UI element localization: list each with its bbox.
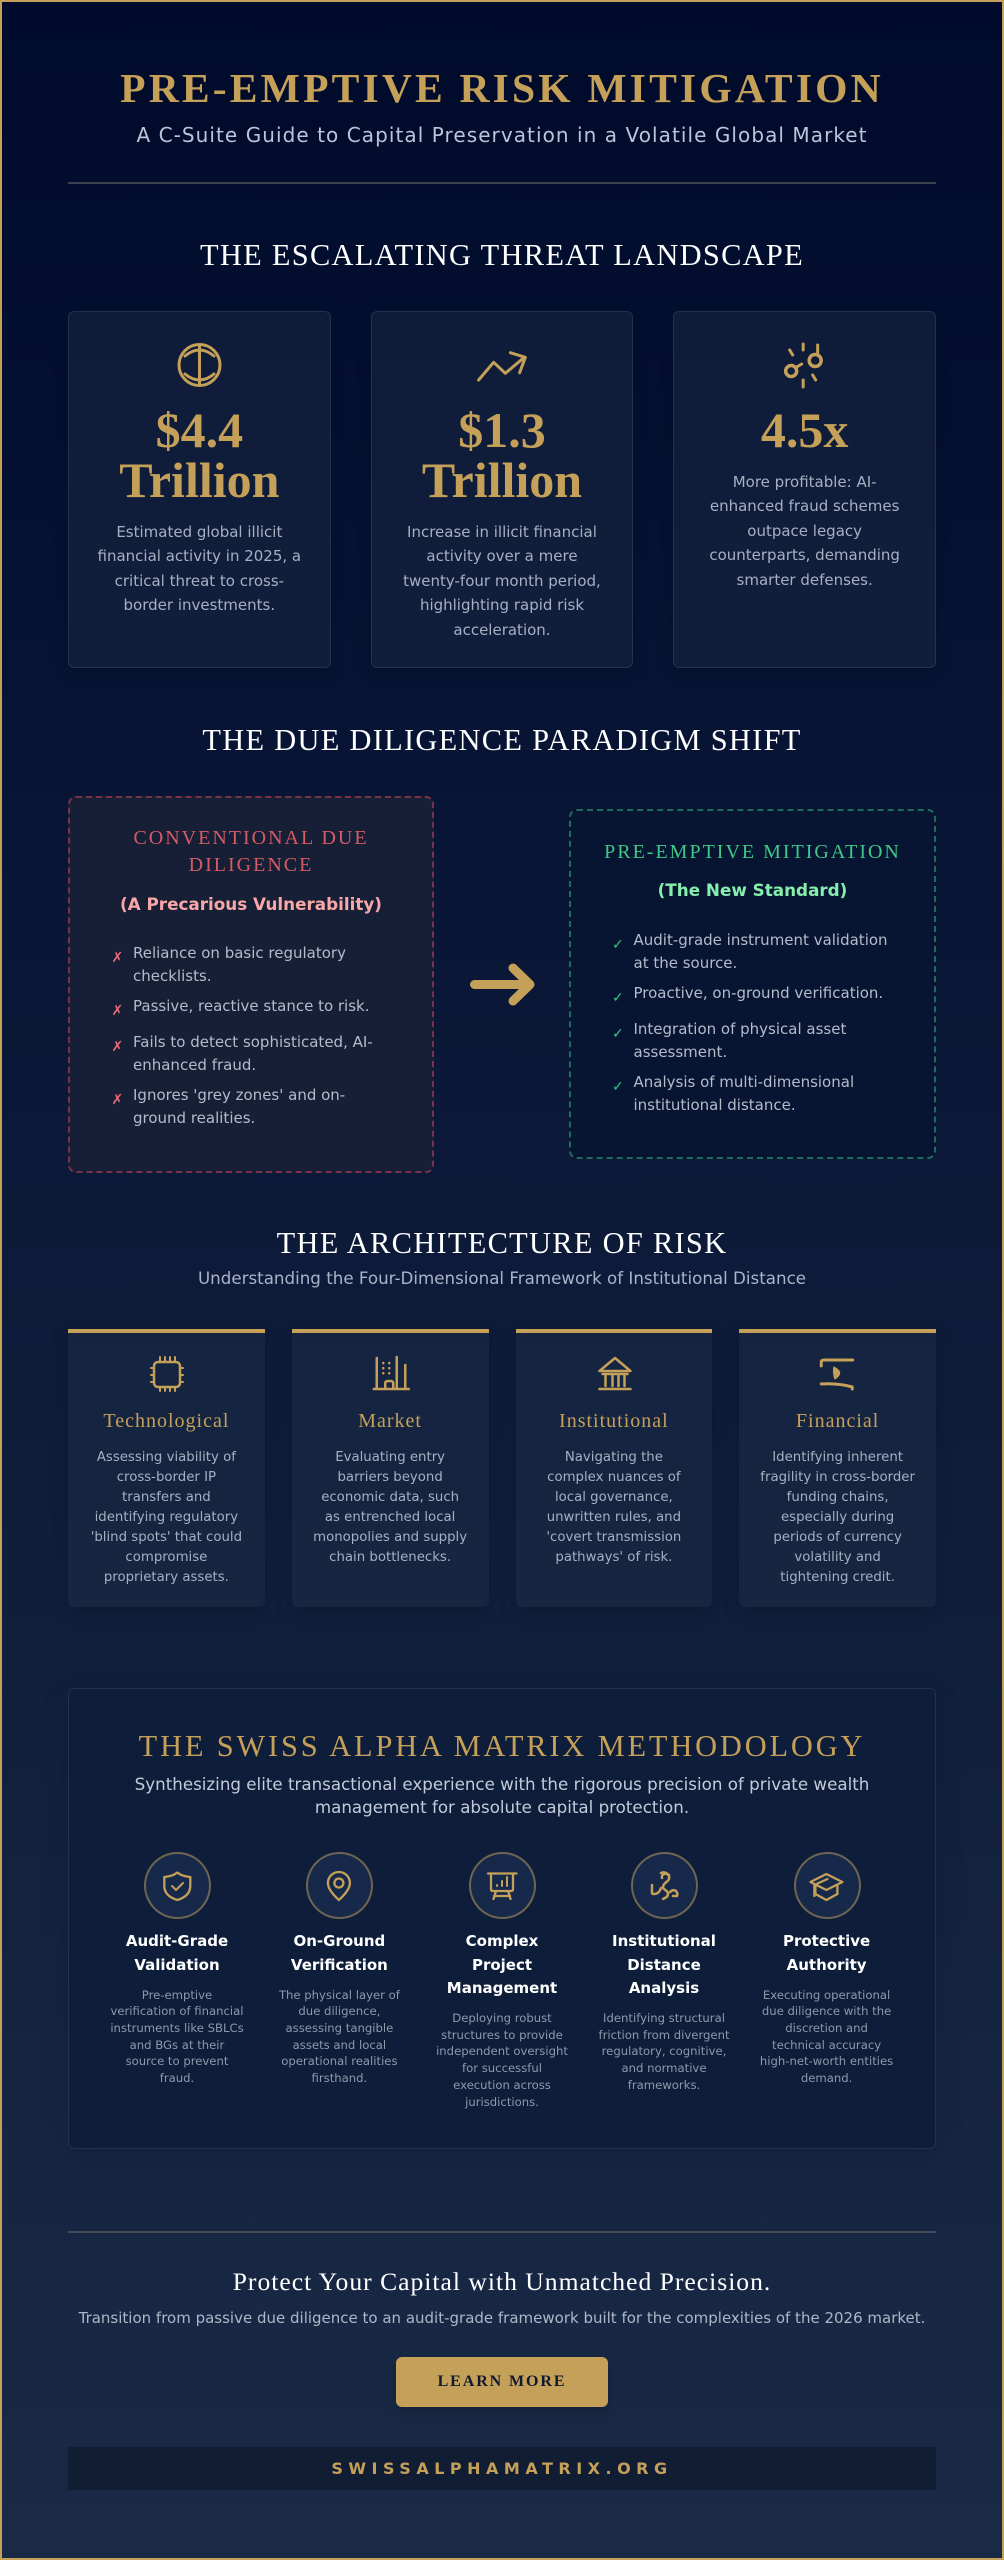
icon: shield [163,1871,192,1902]
item 1 [112,944,346,985]
step text: technical accuracy [772,2038,881,2052]
icon: presentation board [486,1870,520,1902]
step title: Project [472,1956,532,1974]
card title: Institutional [559,1410,669,1432]
item 1 [612,931,888,972]
card text: as entrenched local [325,1510,455,1525]
vulnerability list [112,944,373,1127]
standard list [612,931,888,1114]
panel: institutional [516,1329,712,1607]
step title: Analysis [629,1979,699,1997]
step title: Management [447,1979,557,1997]
panel heading: CONVENTIONAL DUE [133,827,369,849]
header rule [68,182,936,184]
stat description: twenty-four month period, [403,572,601,590]
panel: stat 4.5x [673,311,936,668]
card text: pathways' of risk. [555,1550,672,1565]
card text: barriers beyond [337,1470,443,1485]
item 1: ✗ [112,950,123,966]
step text: frameworks. [628,2078,700,2092]
item 1: Audit-grade instrument validation [634,931,888,949]
icon: map pin [326,1870,351,1902]
item 1: at the source. [634,954,737,972]
card text: transfers and [122,1490,211,1505]
card text: local governance, [555,1490,673,1505]
stat value: 4.5x [761,402,848,458]
heading: threat landscape: THE ESCALATING THREAT LANDSCAPE [200,238,804,272]
card text: unwritten rules, and [547,1510,681,1525]
step text [583,2010,745,2094]
subtitle: A C-Suite Guide to Capital Preservation in a Volatile Global Market [136,122,868,146]
icon ring [144,1852,211,1919]
icon: chip [150,1356,184,1392]
card text: Evaluating entry [335,1450,445,1464]
icon: temple [598,1356,632,1390]
stat description: border investments. [124,596,275,614]
section subtitle: Understanding the Four-Dimensional Framework of Institutional Distance [198,1268,806,1288]
heading: paradigm shift: THE DUE DILIGENCE PARADIGM SHIFT [202,723,802,757]
step text [278,1988,400,2085]
item 3: Integration of physical asset [634,1020,846,1038]
item 4: Analysis of multi-dimensional [634,1073,854,1091]
step text: assessing tangible [286,2021,393,2035]
card text: Identifying inherent [772,1450,903,1464]
step: institutional distance analysis [583,1852,745,2142]
card text: volatility and [794,1550,881,1565]
card title: Technological [103,1410,229,1432]
item 3: Fails to detect sophisticated, AI- [133,1033,373,1051]
stat description: smarter defenses. [737,570,873,588]
panel heading [133,827,369,876]
card text [760,1450,915,1585]
step title: Complex [466,1932,538,1950]
stat description [403,522,601,638]
step text: jurisdictions. [465,2095,539,2109]
cta rule [68,2231,936,2233]
step text [746,1986,908,2087]
icon: broken chain [784,342,823,388]
panel: pre-emptive mitigation [569,809,936,1159]
item 3: assessment. [634,1043,727,1061]
step text: firsthand. [312,2071,367,2085]
call to action [68,2231,936,2409]
card text: funding chains, [787,1490,889,1505]
panel: swiss alpha matrix methodology [68,1688,936,2149]
step title: Distance [627,1956,701,1974]
stat description [98,522,301,614]
icon: globe [178,343,222,387]
step text: Identifying structural [603,2011,725,2025]
cta text: Transition from passive due diligence to an audit-grade framework built for the complexities of the 2026 market. [79,2309,925,2327]
stat description: enhanced fraud schemes [710,497,899,515]
item 4: ✗ [112,1092,123,1108]
card text: tightening credit. [780,1570,895,1585]
icon: trend arrow [477,351,527,382]
step text: regulatory, cognitive, [602,2044,726,2058]
card text [91,1450,242,1585]
stat value [422,402,582,508]
item 3: ✓ [612,1026,624,1042]
panel: stat $1.3 trillion [371,311,633,668]
item 3 [112,1033,373,1074]
step: protective authority [746,1852,908,2142]
step title [583,1930,745,2000]
panel subheading: (The New Standard) [658,880,847,900]
card text: periods of currency [773,1530,902,1545]
item 4 [612,1073,854,1114]
item 3: enhanced fraud. [133,1056,256,1074]
footer bar [68,2447,936,2490]
panel: market [292,1329,488,1607]
card text [313,1450,467,1565]
panel intro: management for absolute capital protection. [315,1797,689,1817]
card text [546,1450,681,1565]
card title: Market [358,1410,422,1432]
item 4 [112,1086,345,1127]
stat description: critical threat to cross- [115,572,284,590]
item 1: checklists. [133,967,212,985]
item 2: Proactive, on-ground verification. [634,984,883,1002]
step title [126,1932,228,1974]
card text: especially during [781,1510,894,1525]
stat value: $4.4 [156,402,243,458]
step title: Protective [783,1932,870,1950]
step text [421,2010,583,2110]
step text: independent oversight [436,2044,568,2058]
card text: Assessing viability of [97,1450,236,1464]
stat description: financial activity in 2025, a [98,547,301,565]
stat description: Estimated global illicit [116,522,282,540]
card text: chain bottlenecks. [329,1550,451,1565]
panel heading: DILIGENCE [189,854,313,876]
card text: identifying regulatory [95,1510,238,1525]
icon: finance glyph [820,1358,854,1390]
section title: THE ARCHITECTURE OF RISK [277,1226,727,1260]
step title: Institutional [612,1932,716,1950]
icon: buildings [372,1356,410,1390]
stat value: $1.3 [458,402,546,458]
item 4: Ignores 'grey zones' and on- [133,1086,345,1104]
panel: financial [739,1329,936,1607]
stat description: Increase in illicit financial [407,522,597,540]
step text: The physical layer of [279,1988,400,2002]
step text: Pre-emptive [142,1988,212,2002]
item 1: Reliance on basic regulatory [133,944,346,962]
panel: conventional due diligence [68,796,434,1172]
item 2: Passive, reactive stance to risk. [133,997,370,1015]
step text: Executing operational [763,1988,890,2002]
stat description: activity over a mere [426,547,578,565]
step title [746,1930,908,1977]
step title: Audit-Grade [126,1932,228,1950]
card text: proprietary assets. [104,1570,229,1585]
step text: source to prevent [126,2054,228,2068]
card text: cross-border IP [117,1470,216,1485]
panel subheading: (A Precarious Vulnerability) [120,894,382,914]
step text: and BGs at their [130,2038,224,2052]
step text: fraud. [160,2071,194,2085]
step: on-ground verification [278,1852,400,2085]
step text [110,1988,244,2085]
step text: due diligence, [298,2004,380,2018]
icon ring [469,1852,536,1919]
step text: discretion and [785,2021,868,2035]
step text: instruments like SBLCs [110,2021,244,2035]
item 3 [612,1020,846,1061]
title: PRE-EMPTIVE RISK MITIGATION [120,65,884,111]
footer bar: SWISSALPHAMATRIX.ORG [331,2459,673,2478]
step text: friction from divergent [598,2028,730,2042]
stat description: acceleration. [453,620,551,638]
step text: execution across [453,2078,551,2092]
stat description: highlighting rapid risk [420,596,584,614]
step text: and normative [621,2061,706,2075]
heading: architecture of risk [198,1226,806,1288]
stat description: counterparts, demanding [709,546,900,564]
item 4: ✓ [612,1079,624,1095]
header [68,65,936,184]
item 4: ground realities. [133,1109,255,1127]
step title: On-Ground [294,1932,385,1950]
icon ring [631,1852,698,1919]
stat value: Trillion [119,452,279,508]
stat description: outpace legacy [747,522,862,540]
step title [421,1930,583,2000]
step text: for successful [462,2061,542,2075]
panel: technological [68,1329,265,1607]
step text: Deploying robust [452,2011,552,2025]
card text: monopolies and supply [313,1530,467,1545]
step title [291,1932,388,1974]
step title: Verification [291,1956,388,1974]
icon: graduation cap [810,1870,846,1902]
step text: operational realities [281,2054,398,2068]
card title: Financial [796,1410,879,1432]
step text: high-net-worth entities [760,2054,893,2068]
step text: structures to provide [441,2028,563,2042]
icon: network [648,1870,682,1902]
icon ring [306,1852,373,1919]
icon ring [794,1852,861,1919]
item 4: institutional distance. [634,1096,796,1114]
step text: assets and local [293,2038,386,2052]
card text: complex nuances of [547,1470,681,1485]
item 3: ✗ [112,1039,123,1055]
item 1: ✓ [612,937,624,953]
stat value [119,402,279,508]
card text: compromise [125,1550,207,1565]
arrow [470,964,534,1006]
button: learn more [396,2357,608,2407]
step: audit-grade validation [110,1852,244,2085]
panel heading: PRE-EMPTIVE MITIGATION [604,840,901,862]
card text: fragility in cross-border [760,1470,915,1485]
step: complex project management [436,1852,568,2109]
card text: Navigating the [565,1450,663,1464]
panel intro [135,1774,869,1817]
stat value: Trillion [422,452,582,508]
step title: Authority [787,1956,867,1974]
item 2: ✗ [112,1003,123,1019]
panel heading: THE SWISS ALPHA MATRIX METHODOLOGY [139,1729,865,1763]
card text: 'blind spots' that could [91,1530,242,1545]
step title: Validation [134,1956,220,1974]
card text: economic data, such [321,1490,459,1505]
panel intro: Synthesizing elite transactional experience with the rigorous precision of private wealth [135,1774,869,1794]
step text: due diligence with the [762,2004,891,2018]
item 2: ✓ [612,990,624,1006]
panel: stat $4.4 trillion [68,311,331,668]
step text: verification of financial [110,2004,244,2018]
button: learn more: LEARN MORE [438,2373,566,2390]
card text: 'covert transmission [546,1530,681,1545]
stat description [709,472,900,588]
stat description: More profitable: AI- [733,472,877,490]
cta heading: Protect Your Capital with Unmatched Precision. [233,2267,771,2296]
step text: demand. [801,2071,852,2085]
